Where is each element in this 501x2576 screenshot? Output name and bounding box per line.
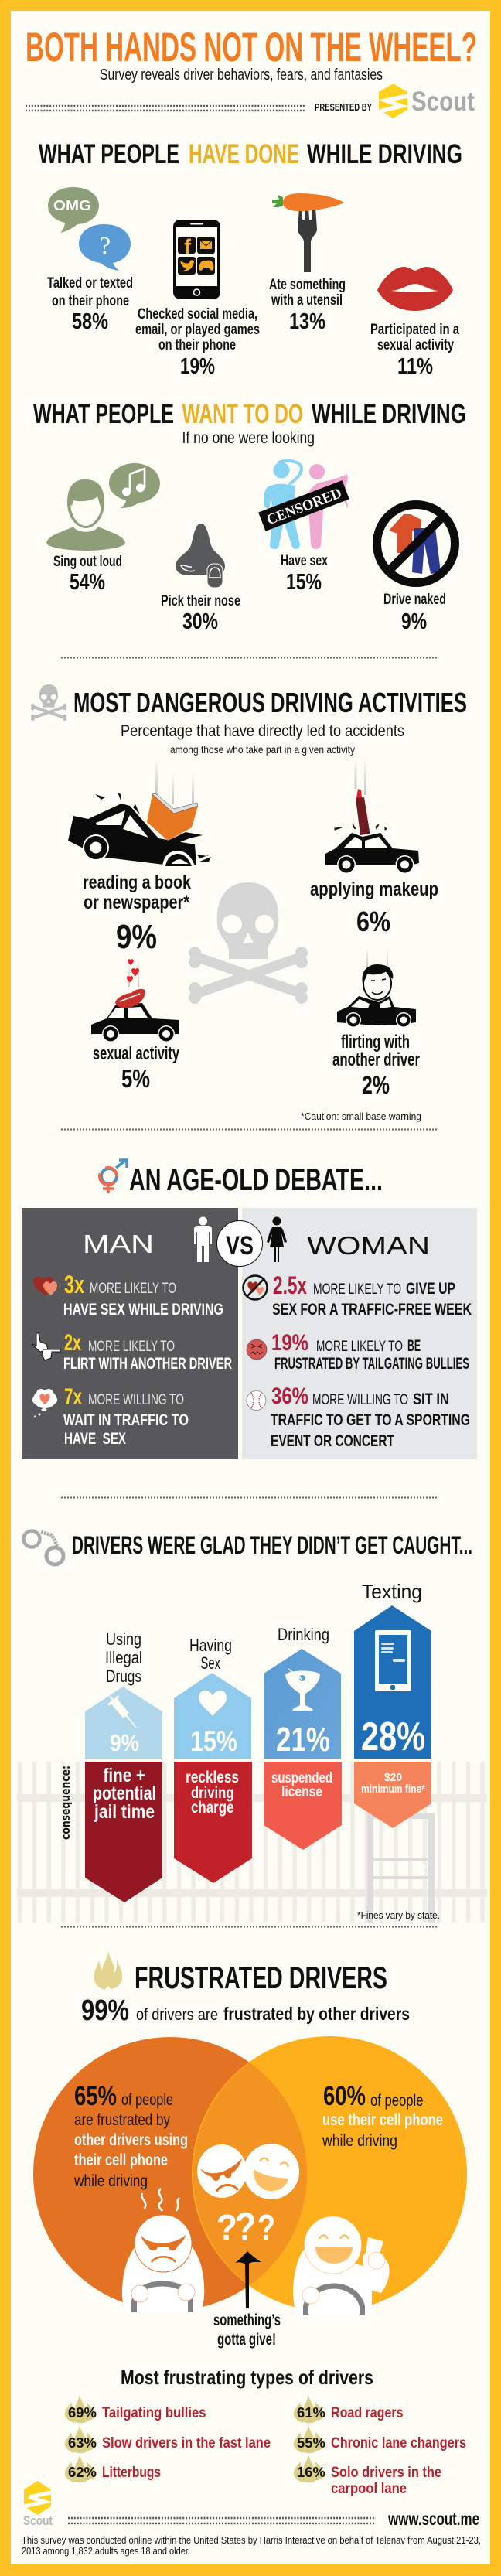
column: texting <box>354 1580 431 1828</box>
venn right text <box>322 2081 443 2150</box>
icon: large skull <box>189 882 308 1004</box>
list: frustrating drivers left: Tailgating bullies <box>102 2405 206 2421</box>
dotted rule <box>26 106 305 111</box>
item: pick their nose: 30% <box>182 609 218 634</box>
icon: red lips <box>377 267 453 311</box>
icon: car with flirting driver <box>337 947 416 1028</box>
list: frustrating drivers left: 63% <box>68 2434 97 2451</box>
item: drive naked: Drive naked <box>383 592 446 608</box>
Scout wordmark: Scout <box>411 87 475 117</box>
item: have sex <box>281 553 328 595</box>
section: age-old debate <box>22 1160 477 1459</box>
stat: 19%: MORE LIKELY TO <box>316 1338 403 1355</box>
icon: nose and finger <box>176 524 225 588</box>
list: frustrating drivers right: Road ragers <box>331 2405 404 2421</box>
item: checked social media: 19% <box>180 354 215 379</box>
caption <box>213 2312 281 2349</box>
column: texting: $20 <box>384 1771 402 1784</box>
item: ate something: 13% <box>289 309 325 334</box>
section: most dangerous driving activities <box>31 684 467 1122</box>
subheading: of drivers are <box>136 2006 218 2024</box>
item: checked social media <box>135 306 260 379</box>
item: sexual activity <box>370 322 459 379</box>
heading: woman: WOMAN <box>307 1232 430 1261</box>
list: frustrating drivers right: 55% <box>297 2434 325 2451</box>
column: drinking: Drinking <box>278 1625 329 1644</box>
stat: 7x: HAVE SEX <box>64 1430 126 1448</box>
label: reading a book <box>83 872 191 956</box>
item: talked or texted: on their phone <box>52 293 129 309</box>
arrow: something's gotta give <box>235 2251 261 2308</box>
icon: question marks: ? <box>216 2207 237 2247</box>
stat: 2x: 2x <box>64 1330 81 1356</box>
label: sexual activity <box>93 1043 179 1093</box>
icon: question marks: ? <box>257 2207 275 2247</box>
source note <box>22 2535 481 2557</box>
dotted rule <box>68 2518 376 2523</box>
stat: 36%: 36% <box>271 1384 308 1409</box>
column: having sex: 15% <box>190 1725 237 1757</box>
item: sing out loud <box>53 554 122 595</box>
column: illegal drugs: 9% <box>110 1729 139 1756</box>
column: having sex: reckless <box>186 1769 239 1786</box>
column: illegal drugs: potential <box>93 1783 156 1804</box>
list: frustrating drivers right: 16% <box>297 2464 325 2480</box>
list: frustrating drivers right <box>294 2394 466 2497</box>
venn left text: of people <box>121 2091 173 2109</box>
stat: 36%: MORE WILLING TO <box>312 1391 408 1408</box>
subheading: If no one were looking <box>182 429 315 447</box>
stat: 19%: 19% <box>271 1330 308 1356</box>
item: sing out loud: Sing out loud <box>53 554 122 570</box>
stat: 36%: SIT IN <box>413 1390 449 1408</box>
stat: 2x <box>32 1330 232 1373</box>
heading <box>33 399 466 429</box>
panel: woman <box>242 1208 477 1459</box>
icon: question marks: ? <box>235 2205 256 2250</box>
item: talked or texted: 58% <box>72 309 108 334</box>
item: sexual activity: Participated in a <box>370 322 459 338</box>
icon: speech bubbles: OMG <box>53 198 91 213</box>
stat: 7x: MORE WILLING TO <box>88 1391 184 1408</box>
icon: car hit by lipstick <box>325 758 419 874</box>
label: reading a book: or newspaper* <box>84 892 189 913</box>
list: frustrating drivers right: Solo drivers in the <box>331 2465 441 2481</box>
icon: smartphone <box>173 220 220 299</box>
stat: 36% <box>247 1384 470 1450</box>
venn left text: 65% <box>74 2081 117 2111</box>
stat: 2.5x: MORE LIKELY TO <box>313 1281 401 1298</box>
icon: singing man <box>46 463 160 551</box>
column: having sex: charge <box>191 1799 233 1817</box>
heading: man: MAN <box>83 1230 154 1259</box>
column: texting: Texting <box>362 1580 422 1603</box>
icon: censored couple <box>258 461 349 549</box>
icon: carrot on fork <box>272 193 344 272</box>
icon: censored couple: CENSORED <box>264 485 344 528</box>
item: pick their nose: Pick their nose <box>161 593 240 609</box>
label: flirting: 2% <box>362 1071 390 1099</box>
column: illegal drugs: Using <box>106 1629 141 1649</box>
chart label: consequence: consequence: <box>59 1766 73 1840</box>
stat: 2.5x: 2.5x <box>273 1271 307 1299</box>
column: illegal drugs: jail time <box>94 1801 155 1823</box>
column: drinking: license <box>281 1784 322 1800</box>
item: pick their nose <box>161 593 240 634</box>
venn right text: of people <box>370 2092 424 2110</box>
column: drinking <box>264 1625 342 1850</box>
venn right text: while driving <box>322 2132 397 2150</box>
stat: 3x <box>33 1271 223 1319</box>
jail fence background <box>17 1762 487 1923</box>
presented by: PRESENTED BY <box>315 102 372 113</box>
item: ate something: with a utensil <box>271 292 343 309</box>
item: checked social media: email, or played games <box>135 322 260 338</box>
heading: WHAT PEOPLE <box>33 399 174 429</box>
column: having sex: Sex <box>201 1653 220 1673</box>
icon: smartphone: f <box>184 235 192 258</box>
label: applying makeup <box>310 879 438 937</box>
stat: 3x: MORE LIKELY TO <box>90 1280 176 1297</box>
venn left text: while driving <box>73 2172 148 2190</box>
column: illegal drugs: fine + <box>104 1765 145 1786</box>
subheading <box>81 1994 410 2027</box>
stat: 3x: 3x <box>64 1271 84 1298</box>
section: frustrated drivers <box>11 1951 490 2497</box>
list: frustrating drivers right: Chronic lane changers <box>331 2435 466 2451</box>
label: flirting: another driver <box>332 1049 420 1070</box>
venn left text: are frustrated by <box>74 2111 170 2129</box>
icon: flame <box>94 1951 122 1990</box>
icon: question marks <box>216 2205 275 2250</box>
list: frustrating drivers left: Litterbugs <box>102 2465 161 2481</box>
label: flirting: flirting with <box>341 1032 410 1053</box>
subheading: 99% <box>81 1994 129 2027</box>
heading: FRUSTRATED DRIVERS <box>135 1961 387 1995</box>
subheading: frustrated by other drivers <box>223 2004 410 2024</box>
heading: WANT TO DO <box>182 399 303 429</box>
icon: gender symbols <box>100 1160 127 1193</box>
list: frustrating drivers right: carpool lane <box>331 2481 407 2497</box>
icon: happy driver <box>293 2216 389 2315</box>
section: what people have done <box>39 139 462 379</box>
stat: 2.5x <box>243 1271 472 1319</box>
icon: no clothes <box>377 504 455 583</box>
stat: 2.5x: GIVE UP <box>406 1280 455 1298</box>
list: frustrating drivers left: 69% <box>68 2404 97 2421</box>
heading: WHAT PEOPLE <box>39 139 179 169</box>
icon: Scout logo <box>379 84 407 118</box>
column: illegal drugs <box>85 1629 162 1902</box>
label: reading a book: 9% <box>116 918 157 956</box>
item: sing out loud: 54% <box>70 570 105 595</box>
VS badge <box>216 1220 263 1267</box>
item: have sex: Have sex <box>281 553 328 569</box>
icon: small skull <box>31 684 66 721</box>
icon: car crushed by book <box>68 758 211 866</box>
venn right text: use their cell phone <box>322 2111 443 2129</box>
list: frustrating drivers left: Slow drivers in the fast lane <box>102 2435 271 2451</box>
fines note: *Fines vary by state. <box>357 1909 440 1921</box>
venn left text: their cell phone <box>74 2151 168 2169</box>
item: checked social media: on their phone <box>158 337 236 353</box>
item: sexual activity: 11% <box>397 354 433 379</box>
caution note: *Caution: small base warning <box>301 1111 421 1122</box>
icon: speech bubbles: ? <box>100 231 111 259</box>
icon: angry driver <box>122 2189 204 2312</box>
venn left text <box>73 2081 188 2190</box>
stat: 19%: BE <box>407 1337 421 1355</box>
item: talked or texted <box>47 275 133 334</box>
label: applying makeup: 6% <box>356 906 390 937</box>
subtitle: Survey reveals driver behaviors, fears, and fantasies <box>100 67 383 84</box>
stat: 3x: HAVE SEX WHILE DRIVING <box>63 1301 223 1319</box>
item: drive naked: 9% <box>401 609 427 634</box>
caption: gotta give! <box>217 2331 276 2349</box>
stat: 7x: WAIT IN TRAFFIC TO <box>63 1411 189 1429</box>
caption: something’s <box>213 2312 281 2329</box>
label: sexual activity: 5% <box>121 1064 150 1093</box>
column: having sex: Having <box>189 1636 232 1655</box>
section: what people want to do <box>33 399 466 634</box>
icon: handcuffs <box>23 1531 63 1564</box>
column: illegal drugs: Illegal <box>105 1648 142 1667</box>
column: drinking: suspended <box>271 1770 332 1786</box>
heading <box>39 139 462 169</box>
stat: 7x <box>32 1384 189 1448</box>
source note: 2013 among 1,832 adults ages 18 and older. <box>22 2546 190 2557</box>
stat: 2x: MORE LIKELY TO <box>88 1338 175 1355</box>
venn diagram <box>11 2036 490 2335</box>
list: frustrating drivers right: 61% <box>297 2404 325 2421</box>
stat: 7x: 7x <box>64 1384 82 1410</box>
venn right text: 60% <box>323 2081 366 2111</box>
list: frustrating drivers left <box>65 2394 271 2482</box>
item: ate something: Ate something <box>269 277 346 293</box>
note: among those who take part in a given activity <box>170 743 355 756</box>
subheading: Percentage that have directly led to accidents <box>121 722 404 740</box>
stat: 19% <box>247 1330 469 1373</box>
label: sexual activity: sexual activity <box>93 1043 179 1064</box>
subheading: most frustrating: Most frustrating types of drivers <box>121 2366 373 2389</box>
column: having sex: driving <box>191 1784 233 1802</box>
section: glad they didn't get caught <box>17 1531 487 1923</box>
item: sexual activity: sexual activity <box>377 337 454 353</box>
column: texting: minimum fine* <box>361 1783 425 1796</box>
label: reading a book: reading a book <box>83 872 191 893</box>
item: have sex: 15% <box>286 570 322 595</box>
icon: car hit by kiss <box>91 959 179 1042</box>
item: ate something <box>269 277 346 334</box>
VS badge: VS <box>226 1231 254 1261</box>
heading: HAVE DONE <box>189 139 299 169</box>
list: frustrating drivers left: 62% <box>68 2464 97 2480</box>
item: checked social media: Checked social media, <box>138 306 257 322</box>
column: texting: 28% <box>361 1714 425 1759</box>
item: drive naked <box>383 592 446 634</box>
column: having sex <box>174 1636 252 1883</box>
Scout wordmark small: Scout <box>23 2513 53 2528</box>
item: talked or texted: Talked or texted <box>47 275 133 292</box>
heading: AN AGE-OLD DEBATE... <box>129 1163 383 1197</box>
icon: woman figure <box>267 1217 287 1262</box>
label: applying makeup: applying makeup <box>310 879 438 900</box>
column: drinking: 21% <box>276 1721 330 1759</box>
label: flirting <box>332 1032 420 1099</box>
icon: Scout logo small <box>24 2481 51 2515</box>
header <box>26 25 477 118</box>
panel: man <box>22 1208 238 1459</box>
icon: speech bubbles <box>48 187 131 271</box>
venn left text: other drivers using <box>74 2131 188 2149</box>
icon: man figure <box>194 1217 212 1262</box>
footer <box>22 2481 481 2557</box>
column: illegal drugs: Drugs <box>106 1667 141 1686</box>
icon: angry and happy masks <box>197 2144 299 2199</box>
stat: 2x: FLIRT WITH ANOTHER DRIVER <box>63 1355 232 1373</box>
stat: 36%: EVENT OR CONCERT <box>271 1432 394 1450</box>
